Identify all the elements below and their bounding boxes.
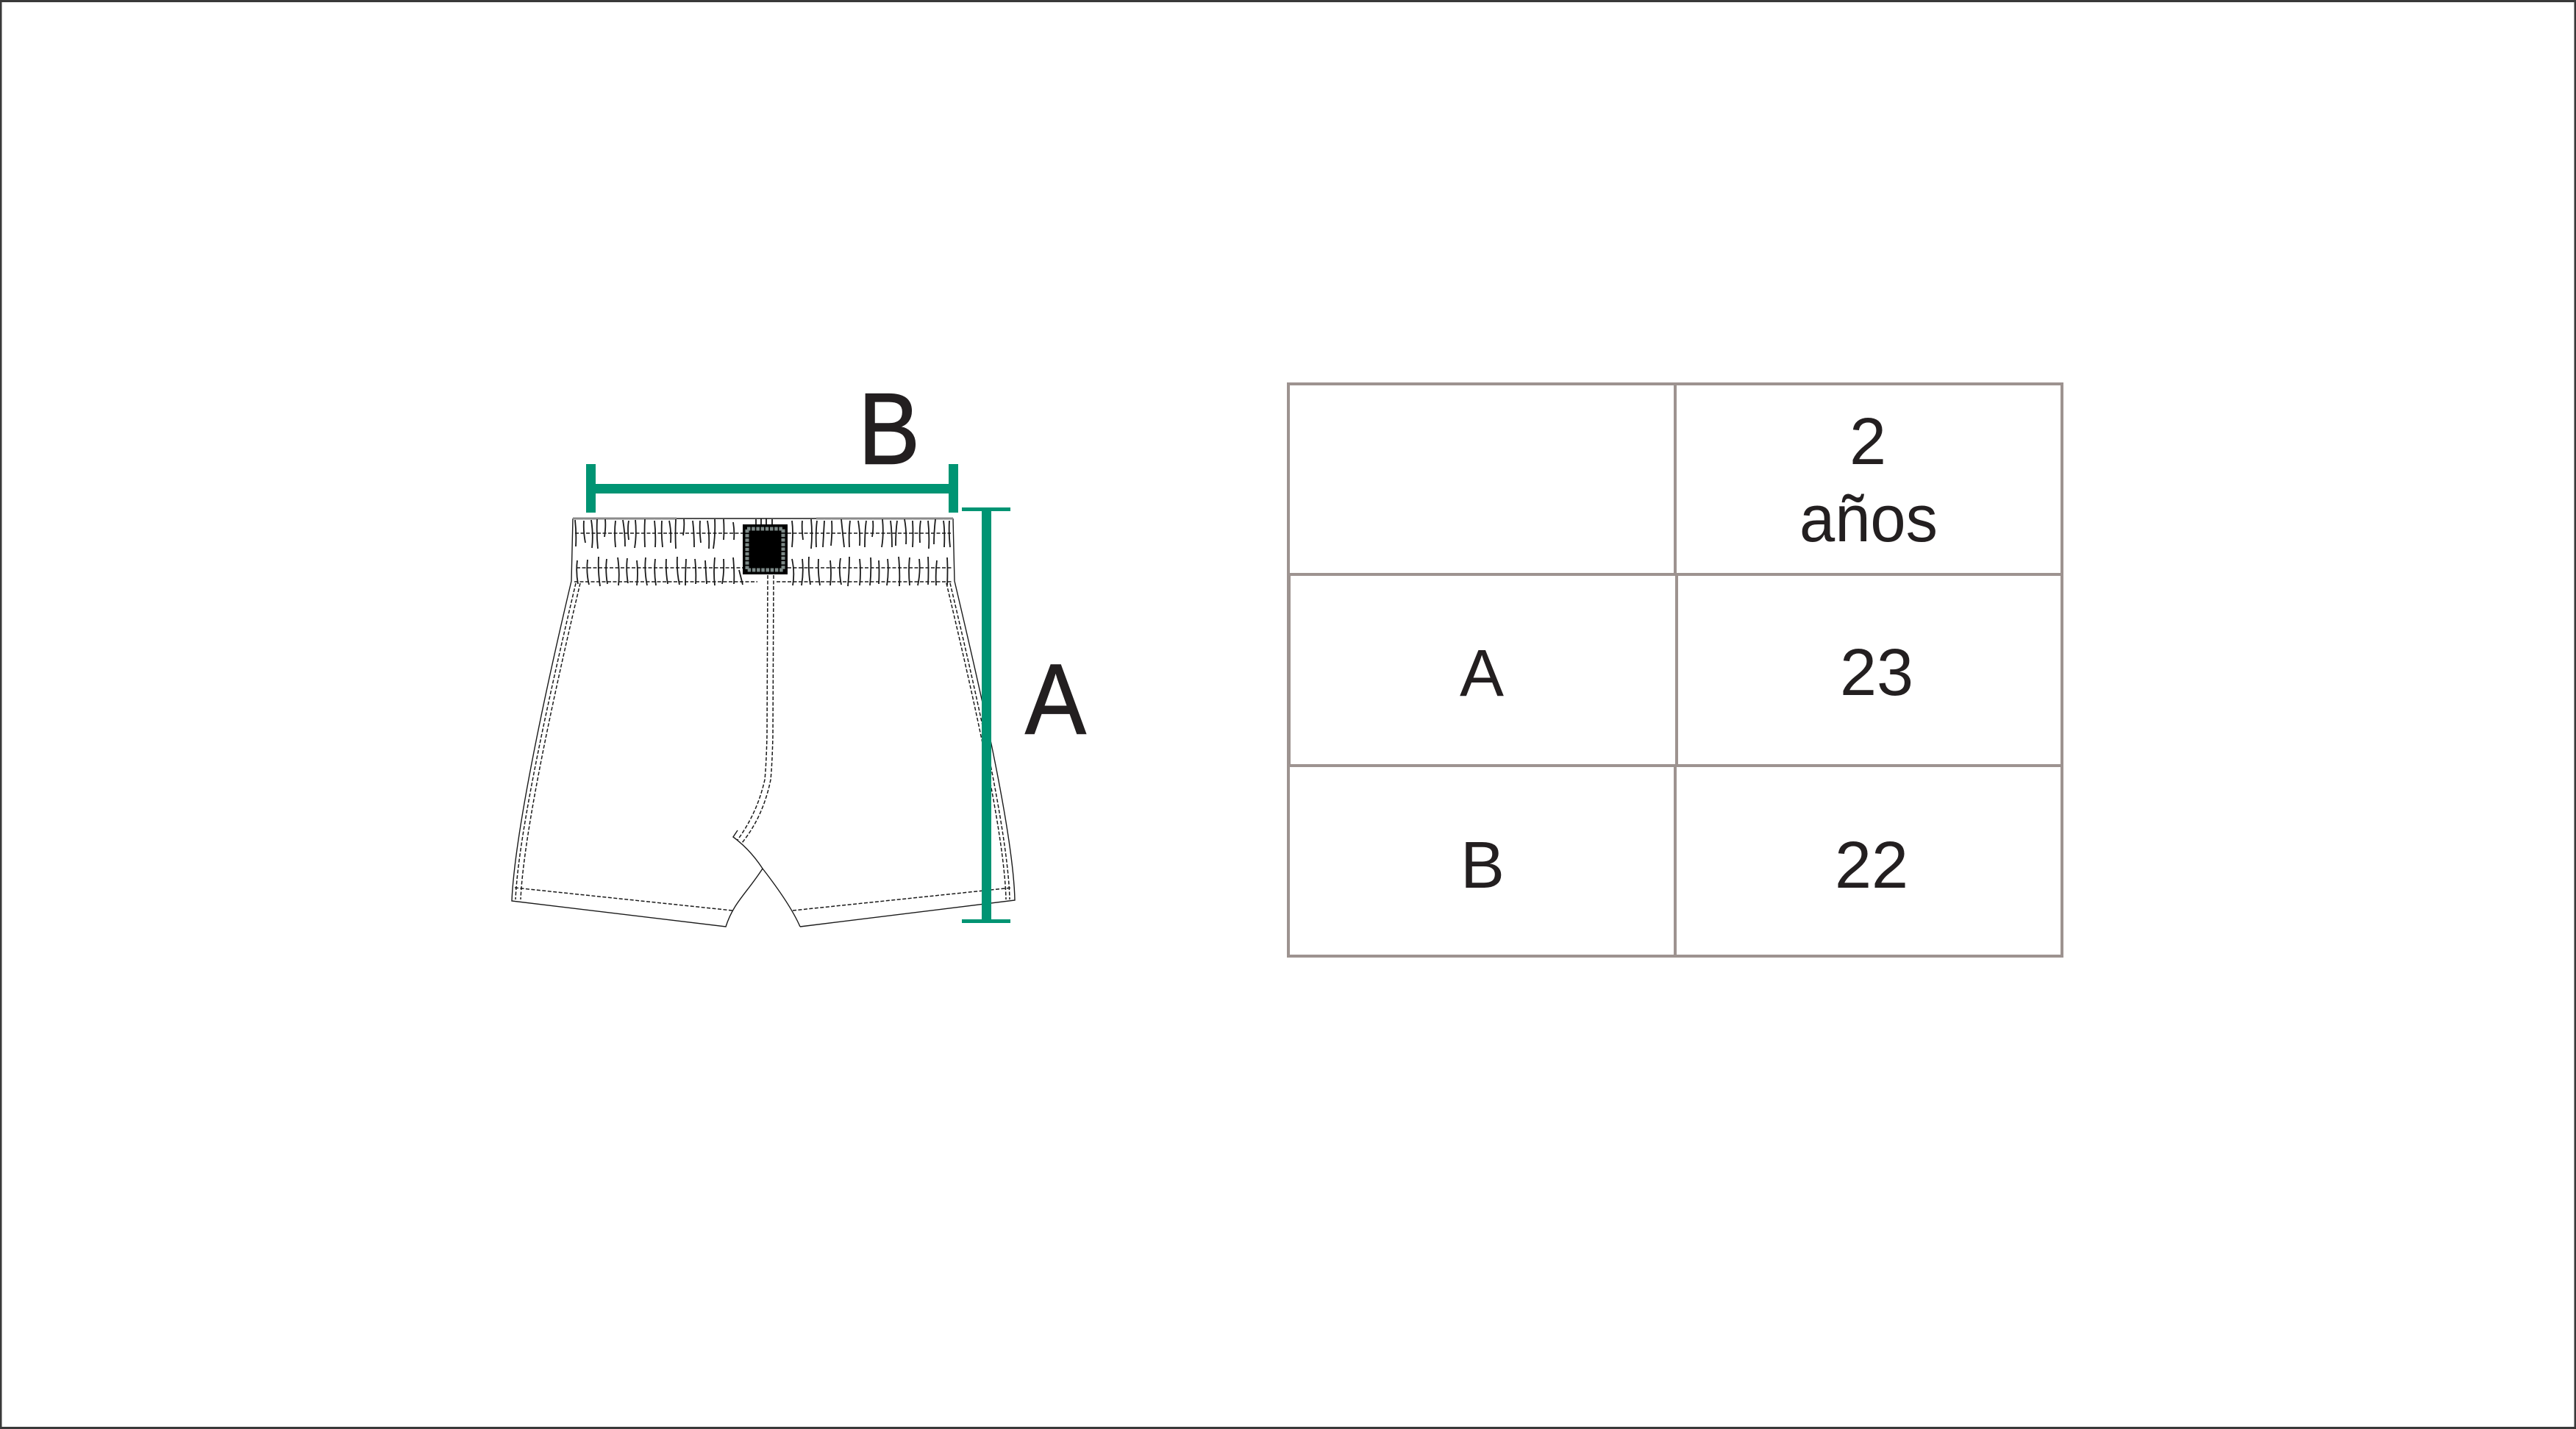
- label A: A: [1025, 643, 1086, 755]
- measure A line: [962, 507, 1010, 923]
- row A label: A: [1460, 637, 1504, 710]
- shorts outline: [512, 518, 1015, 927]
- measure B line: [586, 464, 958, 513]
- waistband gathers: [575, 518, 950, 586]
- row B label: B: [1460, 829, 1505, 902]
- header: 2 años: años: [1799, 482, 1938, 556]
- header: 2 años: 2: [1849, 405, 1886, 479]
- row A value: 23: [1840, 636, 1913, 710]
- size table: [1288, 384, 2062, 956]
- stitching: [515, 533, 1012, 911]
- label B: B: [858, 371, 920, 485]
- table grid: [1288, 384, 2062, 956]
- illustration: shorts with measurements: [512, 371, 1086, 927]
- label patch: [743, 524, 788, 574]
- row B value: 22: [1835, 829, 1908, 902]
- header: 2 años: [1799, 405, 1938, 556]
